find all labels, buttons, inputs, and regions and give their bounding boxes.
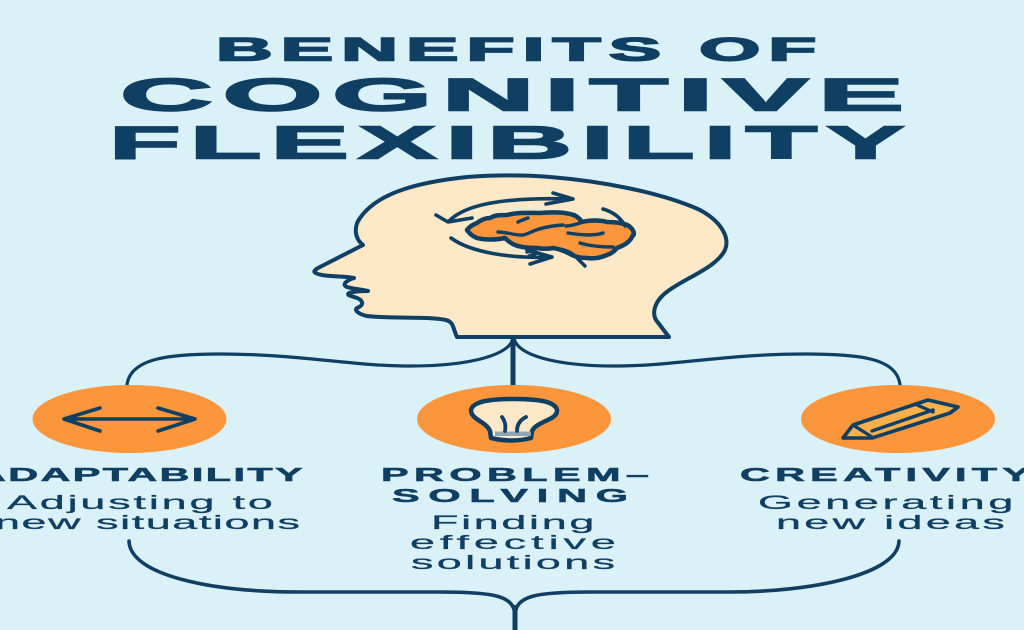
description: problem-solving: Finding [431,512,594,534]
head profile with brain [314,176,726,337]
icon: brain [467,212,634,266]
heading: creativity: CREATIVITY [740,465,1024,485]
description: creativity: new ideas [776,512,1005,534]
description: adaptability: new situations [0,512,300,534]
description: creativity: Generating [758,492,1013,514]
panel: creativity [740,385,1024,534]
panel: problem-solving [381,385,649,574]
description: adaptability: Adjusting to [7,492,273,514]
icon: circular arrows [436,193,625,264]
icon: pencil in orange circle [801,385,995,453]
icon: double-headed arrow in orange circle [32,385,226,453]
description: creativity [758,492,1013,534]
panel: adaptability [0,385,303,534]
heading: problem-solving [381,465,649,506]
description: problem-solving: solutions [411,552,615,574]
title line: cognitive: COGNITIVE [120,69,904,120]
lower connector lines [129,541,899,630]
title line: flexibility: FLEXIBILITY [109,117,905,168]
description: problem-solving [410,512,616,574]
description: adaptability [0,492,300,534]
description: problem-solving: effective [410,532,616,554]
title line: benefits of: BENEFITS OF [216,32,816,67]
heading: problem-solving: PROBLEM– [381,465,649,485]
upper connector lines [127,338,900,386]
icon: head silhouette [314,176,726,337]
icon: light bulb in orange circle [417,385,611,453]
heading: problem-solving: SOLVING [392,486,628,506]
title [109,32,905,168]
